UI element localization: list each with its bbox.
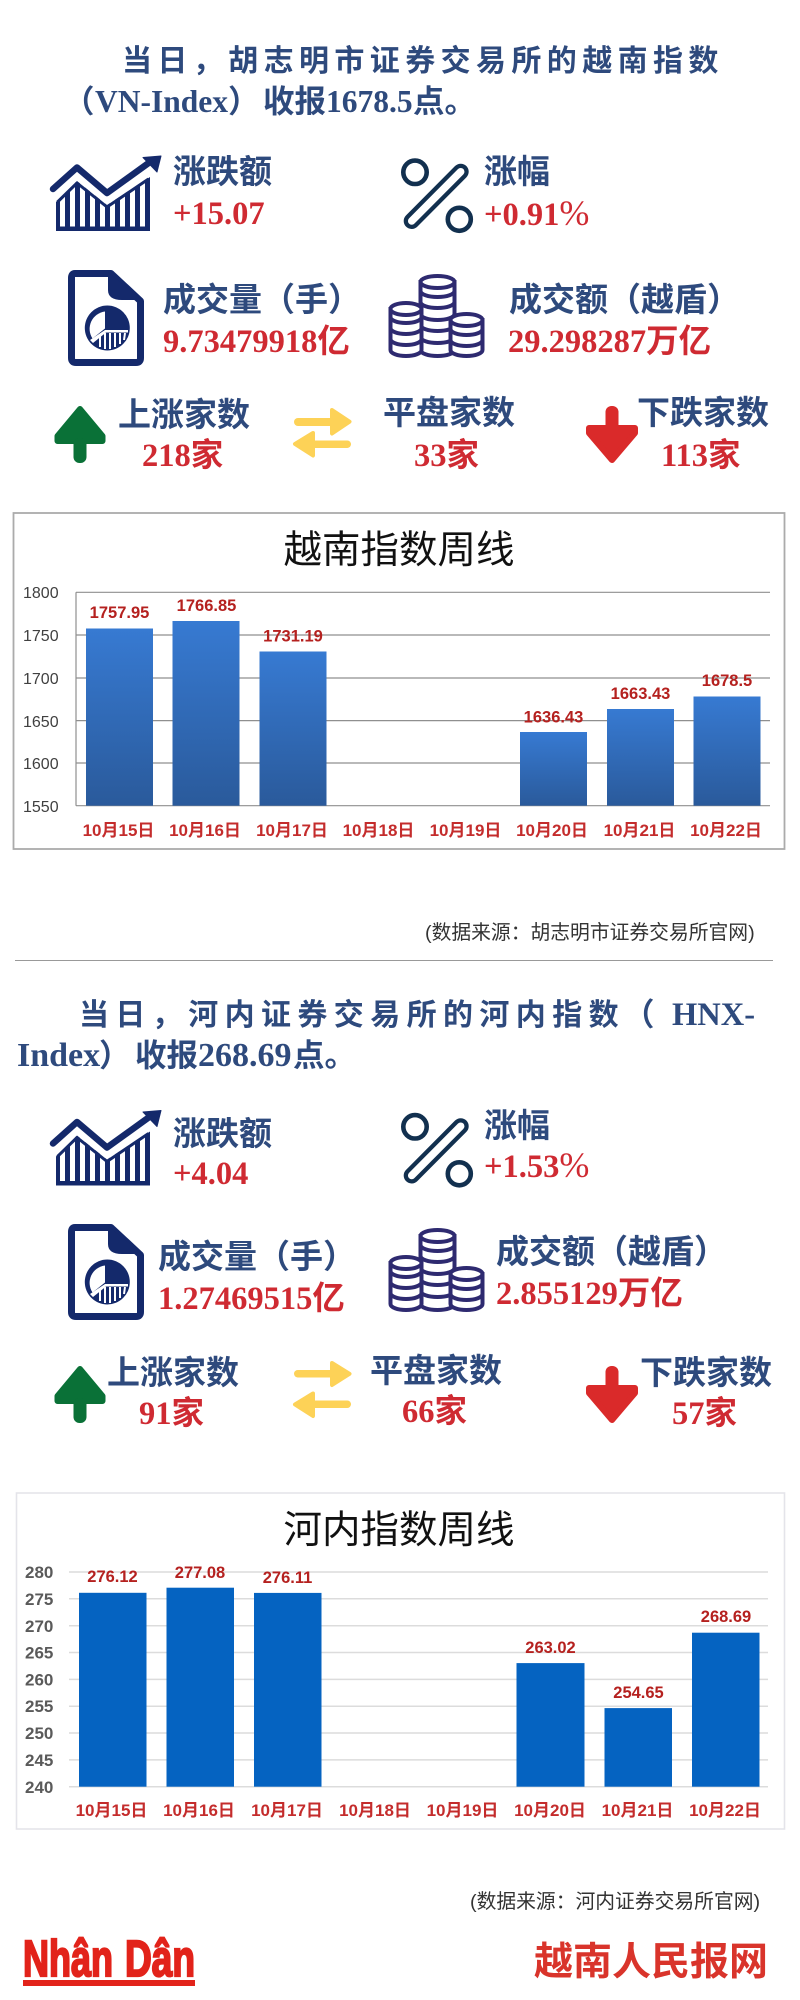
panel: VN-Index weekly bar chart (14, 513, 784, 849)
y axis labels: 1750 (23, 628, 59, 645)
stat: advancers: 上涨家数 (118, 397, 250, 434)
stat: change: +4.04 (173, 1156, 248, 1192)
heading: VN-Index summary: VN-Index (95, 84, 228, 119)
y axis labels: 280 (25, 1563, 53, 1582)
data labels: 1757.95 (90, 604, 149, 622)
data labels: 1731.19 (263, 628, 323, 646)
stat: volume: 成交量（手） (163, 282, 361, 319)
x axis labels: 10月19日 (427, 1801, 498, 1820)
data labels: 268.69 (701, 1608, 751, 1626)
x axis labels: 10月16日 (169, 821, 241, 840)
stat: unchanged: 66家 (402, 1393, 467, 1430)
data labels: 1663.43 (611, 685, 670, 703)
heading: HNX-Index summary: （ (623, 997, 655, 1032)
stat: change percent (484, 1108, 589, 1185)
heading: VN-Index summary: ） (228, 84, 260, 119)
stat: turnover: 2.855129万亿 (496, 1275, 683, 1312)
stat: advancers: 218家 (142, 437, 223, 474)
icon: document (72, 272, 143, 362)
heading: HNX-Index summary: ） (99, 1038, 131, 1073)
y axis labels: 1650 (23, 714, 59, 731)
y axis labels: 1600 (23, 756, 59, 773)
chart title: 河内指数周线 (283, 1509, 515, 1552)
heading: HNX-Index summary: 当日，河内证券交易所的河内指数 (79, 999, 625, 1032)
stat: volume (158, 1239, 356, 1317)
stat: turnover: 成交额（越盾） (509, 282, 740, 319)
data labels: 1766.85 (177, 597, 236, 615)
x axis labels (76, 1801, 761, 1820)
data labels (87, 1564, 751, 1702)
stat: advancers (118, 397, 250, 474)
data labels: 1636.43 (524, 708, 583, 726)
x axis labels: 10月17日 (251, 1801, 323, 1820)
data labels: 1678.5 (702, 672, 752, 690)
icon: coins (390, 1230, 482, 1310)
icon: rising chart (53, 1110, 161, 1186)
icon: up arrow (58, 1369, 102, 1423)
panel: HNX-Index stats (53, 1108, 772, 1432)
stat: change percent: +0.91% (484, 193, 589, 233)
stat: unchanged: 平盘家数 (383, 395, 515, 432)
icon: swap arrows (294, 1363, 351, 1416)
stat: unchanged (383, 395, 515, 474)
data labels (90, 597, 752, 726)
stat: change percent: +1.53% (484, 1145, 589, 1185)
x axis labels: 10月22日 (690, 821, 762, 840)
y axis labels: 1800 (23, 585, 59, 602)
panel: VN-Index stats (53, 154, 769, 474)
icon: swap arrows (294, 410, 351, 456)
stat: volume: 成交量（手） (158, 1239, 356, 1276)
data labels: 276.11 (263, 1569, 312, 1587)
stat: change (173, 1116, 272, 1192)
stat: decliners: 57家 (672, 1395, 737, 1432)
stat: decliners (640, 1355, 772, 1432)
heading: VN-Index summary: 收报 (263, 84, 326, 119)
heading: HNX-Index summary: 268.69 (198, 1037, 292, 1074)
icon: down arrow (589, 406, 635, 460)
x axis labels: 10月18日 (343, 821, 414, 840)
icon: percent (403, 161, 471, 231)
x axis labels: 10月22日 (689, 1801, 761, 1820)
stat: unchanged (370, 1353, 502, 1430)
stat: advancers (107, 1355, 239, 1432)
x axis labels: 10月20日 (514, 1801, 586, 1820)
y axis labels: 270 (25, 1617, 53, 1636)
y axis labels: 250 (25, 1724, 53, 1743)
logo: Nhan Dan: Dân (125, 1930, 195, 1987)
source note: (数据来源：胡志明市证券交易所官网) (425, 922, 755, 944)
y axis labels: 1550 (23, 799, 59, 816)
y axis labels (23, 585, 59, 816)
x axis labels (83, 821, 762, 840)
stat: turnover: 29.298287万亿 (508, 323, 711, 360)
icon: document (72, 1226, 143, 1316)
x axis labels: 10月15日 (83, 821, 154, 840)
panel: HNX-Index weekly bar chart (16, 1493, 784, 1829)
logo: Nhan Dan: Nhân (23, 1930, 113, 1987)
y axis labels: 1700 (23, 671, 59, 688)
source note: (数据来源：河内证券交易所官网) (470, 1891, 760, 1913)
y axis labels: 260 (25, 1670, 53, 1690)
y axis labels: 275 (25, 1590, 53, 1609)
heading: HNX-Index summary: 点。 (293, 1038, 356, 1073)
x axis labels: 10月19日 (430, 821, 501, 840)
stat: turnover (496, 1234, 727, 1312)
icon: down arrow (589, 1366, 635, 1420)
heading: HNX-Index summary: HNX- (672, 997, 755, 1033)
heading: VN-Index summary: 1678.5 (326, 84, 413, 119)
stat: change: 涨跌额 (173, 1116, 272, 1153)
stat: change: +15.07 (173, 196, 265, 232)
stat: change percent: 涨幅 (484, 1108, 550, 1145)
stat: decliners: 下跌家数 (637, 395, 769, 432)
data labels: 254.65 (613, 1684, 664, 1702)
stat: advancers: 91家 (139, 1395, 204, 1432)
y axis labels (25, 1563, 53, 1797)
stat: volume: 1.27469515亿 (158, 1280, 345, 1317)
stat: change percent: 涨幅 (484, 154, 550, 191)
heading: HNX-Index summary: 收报 (135, 1038, 198, 1073)
x axis labels: 10月18日 (339, 1801, 411, 1820)
data labels: 276.12 (87, 1568, 138, 1586)
data labels: 277.08 (175, 1564, 225, 1582)
heading: VN-Index summary: 当日，胡志明市证券交易所的越南指数 (122, 45, 724, 78)
heading: VN-Index summary: （ (63, 84, 95, 119)
y axis labels: 255 (25, 1697, 53, 1716)
y axis labels: 265 (25, 1644, 53, 1662)
icon: up arrow (58, 409, 102, 463)
x axis labels: 10月21日 (602, 1801, 673, 1820)
stat: decliners: 下跌家数 (640, 1355, 772, 1392)
x axis labels: 10月21日 (604, 821, 675, 840)
x axis labels: 10月17日 (256, 821, 328, 840)
stat: unchanged: 33家 (414, 437, 479, 474)
y axis labels: 245 (25, 1751, 53, 1770)
stat: volume: 9.73479918亿 (163, 323, 350, 360)
stat: turnover (508, 282, 740, 360)
icon: coins (390, 276, 482, 356)
heading: HNX-Index summary: Index (17, 1037, 100, 1074)
stat: decliners: 113家 (661, 437, 740, 474)
stat: unchanged: 平盘家数 (370, 1353, 502, 1390)
chart title: 越南指数周线 (283, 529, 515, 572)
x axis labels: 10月20日 (516, 821, 588, 840)
bars (86, 621, 760, 806)
y axis labels: 240 (25, 1778, 53, 1797)
stat: advancers: 上涨家数 (107, 1355, 239, 1392)
stat: turnover: 成交额（越盾） (496, 1234, 727, 1271)
stat: change: 涨跌额 (173, 154, 272, 191)
x axis labels: 10月16日 (163, 1801, 235, 1820)
stat: decliners (637, 395, 769, 474)
heading: VN-Index summary: 点。 (413, 84, 476, 119)
bars (79, 1588, 760, 1787)
data labels: 263.02 (525, 1639, 576, 1657)
stat: change (173, 154, 272, 232)
stat: volume (163, 282, 361, 360)
stat: change percent (484, 154, 589, 233)
brand: site name: 越南人民报网 (534, 1941, 768, 1984)
icon: percent (403, 1115, 471, 1185)
x axis labels: 10月15日 (76, 1801, 147, 1820)
icon: rising chart (53, 156, 161, 232)
